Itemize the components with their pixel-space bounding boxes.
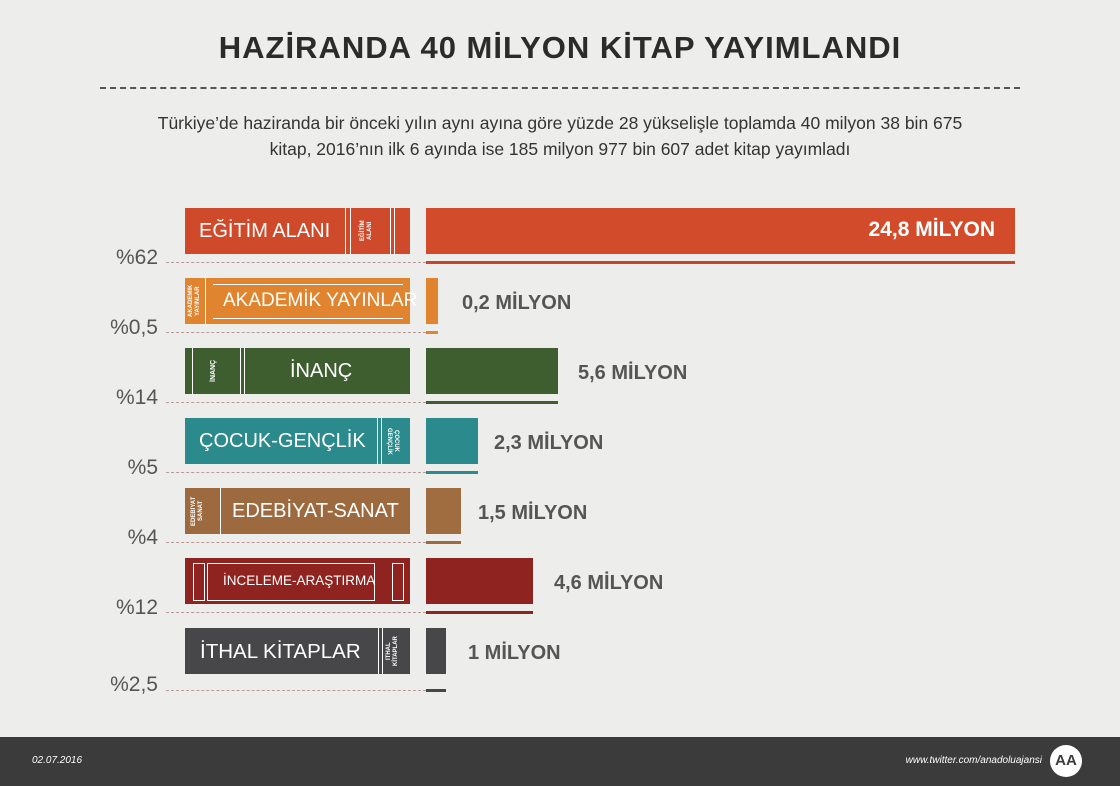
row: egitim: %62 [116,246,158,269]
row: cocuk: ÇOCUK-GENÇLİK [199,430,366,452]
row: ithal: İTHAL KİTAPLAR [200,640,361,663]
row: edebiyat: %4 [128,526,158,549]
title: HAZİRANDA 40 MİLYON KİTAP YAYIMLANDI [219,30,901,65]
row: inanc: 5,6 MİLYON [578,362,687,384]
row: ithal [110,628,561,696]
footer [0,737,1120,786]
row: inceleme: %12 [116,596,158,619]
footer: 02.07.2016 [32,755,82,766]
icon: AA logo: AA [1055,752,1077,769]
row: edebiyat [128,488,587,549]
row: inanc: İNANÇ [290,360,352,382]
subtitle [158,113,962,159]
row: egitim: EĞİTİM ALANI [199,220,330,242]
row: ithal: 1 MİLYON [468,642,561,664]
row: akademik: 0,2 MİLYON [462,292,571,314]
row: edebiyat: 1,5 MİLYON [478,502,587,524]
subtitle: Türkiye’de haziranda bir önceki yılın aynı ayına göre yüzde 28 yükselişle toplamda 40 milyon 38 bin 675 [158,113,962,133]
row: inanc: İNANÇ [210,360,217,382]
icon: AA logo [1050,745,1082,777]
row: egitim: EĞİTİM ALANI [360,221,373,241]
row: cocuk: 2,3 MİLYON [494,432,603,454]
row: cocuk: %5 [128,456,158,479]
row: inanc: %14 [116,386,158,409]
subtitle: kitap, 2016’nın ilk 6 ayında ise 185 milyon 977 bin 607 adet kitap yayımladı [270,139,850,159]
row: akademik: AKADEMİK YAYINLAR [223,290,417,311]
row: inanc [116,348,687,409]
row: akademik: AKADEMİK YAYINLAR [188,285,201,317]
row: edebiyat: EDEBİYAT SANAT [191,496,204,526]
row: akademik: %0,5 [110,316,158,339]
row: ithal: %2,5 [110,673,158,696]
footer: www.twitter.com/anadoluajansi [906,755,1042,766]
row: akademik [110,278,571,339]
row: inceleme [116,558,663,619]
row: edebiyat: EDEBİYAT-SANAT [232,500,399,522]
row: ithal: İTHAL KİTAPLAR [386,636,399,666]
row: egitim [116,208,1015,269]
row: inceleme: İNCELEME-ARAŞTIRMA [223,573,375,588]
row: inceleme: 4,6 MİLYON [554,572,663,594]
row: cocuk: ÇOCUK GENÇLİK [386,428,399,454]
row: cocuk [128,418,603,479]
row: egitim: 24,8 MİLYON [869,218,995,241]
